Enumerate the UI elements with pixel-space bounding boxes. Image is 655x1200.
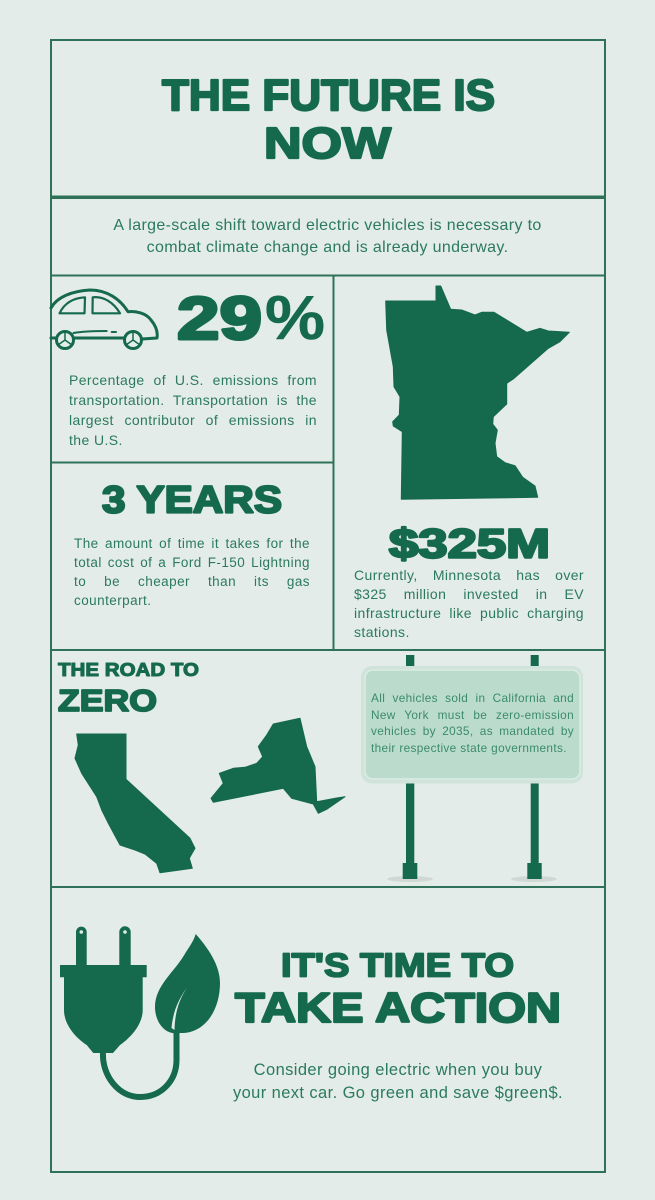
text: 29% description: largest contributor of emissions in	[69, 412, 317, 428]
stat: 29%: %	[265, 284, 325, 353]
heading: the road to zero: ZERO	[58, 683, 157, 718]
text: $325M description: infrastructure like public charging	[354, 605, 584, 621]
title	[162, 71, 495, 168]
intro text: A large-scale shift toward electric vehicles is necessary to	[113, 217, 542, 234]
icon: plug and leaf	[60, 926, 220, 1097]
text: call to action: your next car. Go green and save $green$.	[233, 1084, 563, 1102]
text: 29% description: the U.S.	[69, 432, 123, 448]
text: $325M description: $325 million invested in EV	[354, 586, 584, 602]
map: Minnesota	[386, 286, 569, 499]
text: road sign message: vehicles by 2035, as mandated by	[371, 724, 574, 738]
intro text	[113, 217, 542, 256]
text: road sign message: New York must be zero-emission	[371, 708, 574, 722]
heading: the road to zero	[58, 660, 199, 718]
text: $325M description	[354, 567, 584, 640]
stat: 3 years: 3 YEARS	[102, 480, 282, 522]
heading: the road to zero: THE ROAD TO	[58, 660, 199, 680]
map: New York	[211, 718, 345, 813]
title: NOW	[264, 119, 392, 168]
text: road sign message	[371, 691, 574, 755]
heading: it's time to take action	[235, 946, 561, 1031]
heading: it's time to take action: IT'S TIME TO	[281, 946, 514, 984]
text: road sign message: All vehicles sold in California and	[371, 691, 574, 705]
icon: car	[51, 290, 157, 348]
intro text: combat climate change and is already underway.	[147, 239, 508, 256]
stat: 29%	[177, 284, 325, 353]
text: road sign message: their respective state governments.	[371, 741, 567, 755]
stat: $325M: $325M	[389, 520, 550, 566]
text: 3 years description: total cost of a Ford F-150 Lightning	[74, 555, 310, 570]
heading: it's time to take action: TAKE ACTION	[235, 984, 561, 1031]
text: 29% description: Percentage of U.S. emissions from	[69, 372, 317, 388]
text: 3 years description	[74, 536, 310, 608]
text: call to action	[233, 1060, 563, 1102]
text: call to action: Consider going electric when you buy	[254, 1060, 542, 1078]
text: $325M description: Currently, Minnesota has over	[354, 567, 584, 583]
text: 3 years description: to be cheaper than its gas	[74, 574, 310, 589]
text: 3 years description: The amount of time it takes for the	[74, 536, 310, 550]
text: 29% description: transportation. Transportation is the	[69, 392, 317, 408]
text: $325M description: stations.	[354, 624, 410, 640]
text: 29% description	[69, 372, 317, 448]
text: 3 years description: counterpart.	[74, 593, 151, 608]
title: THE FUTURE IS	[162, 71, 495, 120]
stat: 29%: 29	[177, 285, 262, 352]
map: California	[75, 734, 195, 873]
road sign	[361, 655, 583, 882]
